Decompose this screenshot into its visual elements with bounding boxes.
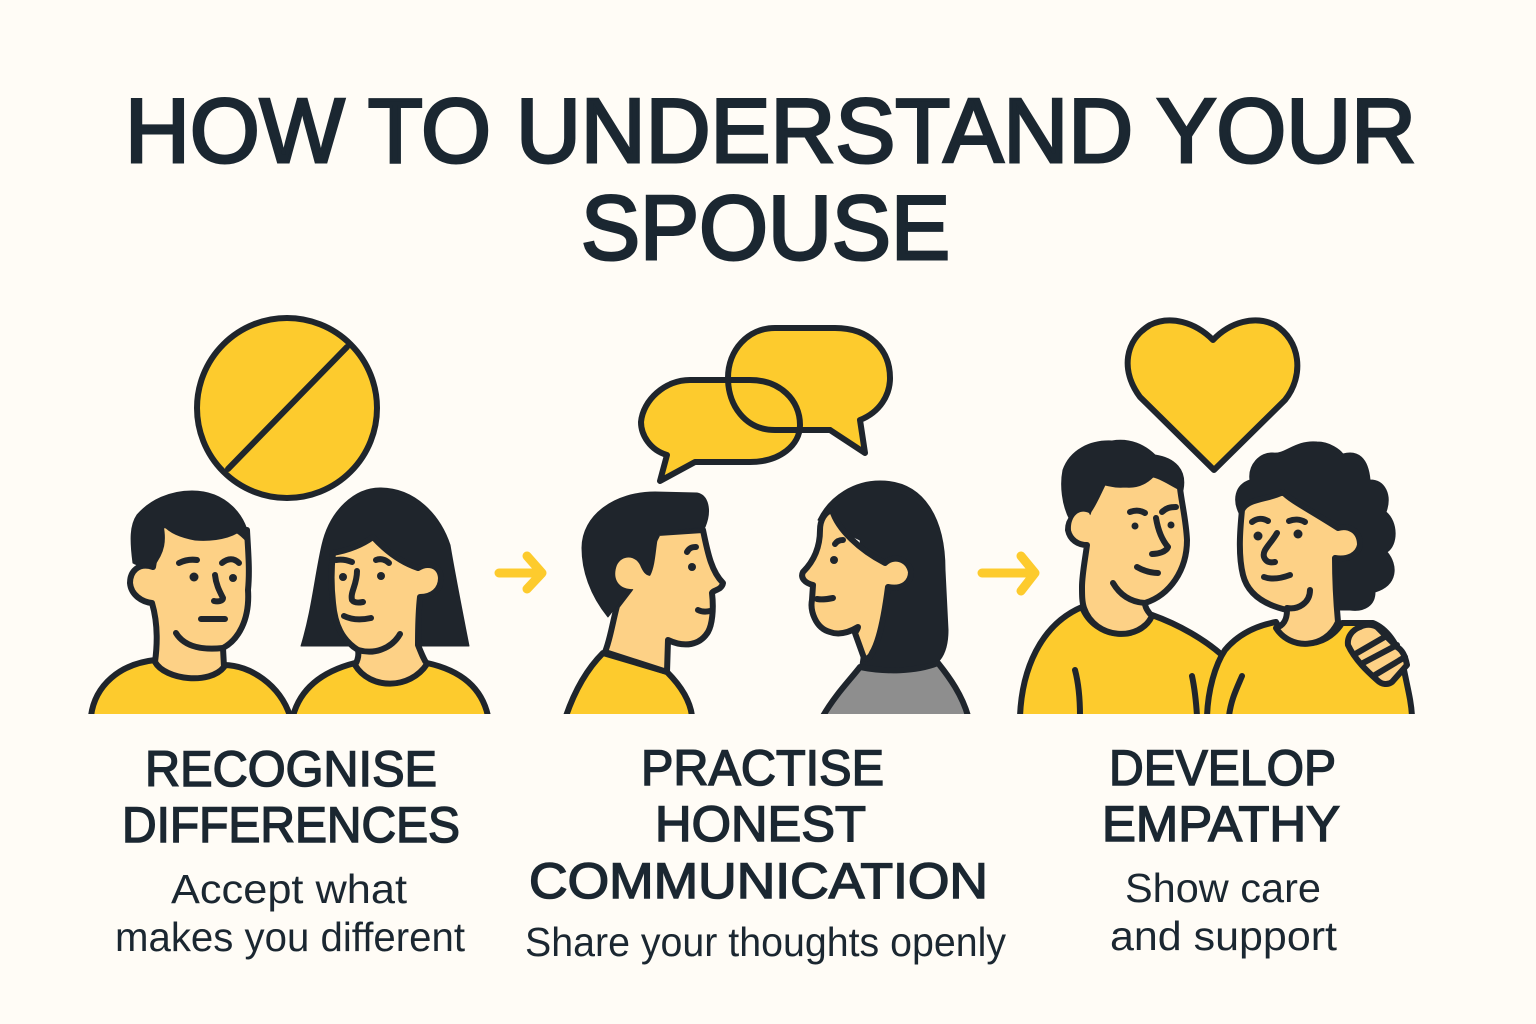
heading [1102, 740, 1340, 852]
icon: speech bubbles [641, 328, 890, 481]
heading: DIFFERENCES [122, 797, 460, 853]
heading: RECOGNISE [145, 741, 437, 797]
woman profile illustration [802, 481, 968, 716]
description [115, 866, 466, 960]
title [125, 81, 1416, 279]
panel: develop empathy [1020, 320, 1412, 959]
man profile illustration [566, 492, 723, 716]
description: Show care [1125, 865, 1321, 911]
arrow [982, 556, 1035, 591]
title: HOW TO UNDERSTAND YOUR [125, 81, 1416, 182]
description [1110, 865, 1338, 959]
heading: DEVELOP [1109, 740, 1336, 796]
icon: divided circle [197, 318, 377, 498]
heading [529, 740, 988, 909]
icon: hand on shoulder [1348, 625, 1407, 684]
icon: heart [1128, 320, 1297, 470]
panel: recognise differences [91, 318, 488, 960]
description: Share your thoughts openly [525, 919, 1006, 965]
heading: PRACTISE [641, 740, 884, 796]
description: makes you different [115, 914, 466, 960]
heading: COMMUNICATION [529, 853, 988, 909]
arrow [499, 556, 542, 589]
panel: practise honest communication [525, 328, 1006, 965]
man illustration [1020, 440, 1222, 716]
man illustration [91, 491, 290, 716]
heading: HONEST [655, 796, 866, 852]
description: and support [1110, 913, 1338, 959]
woman illustration with curly hair [1207, 442, 1412, 716]
heading [122, 741, 460, 853]
heading: EMPATHY [1102, 796, 1340, 852]
title: SPOUSE [581, 178, 950, 279]
woman illustration [293, 488, 488, 716]
description: Accept what [171, 866, 408, 912]
